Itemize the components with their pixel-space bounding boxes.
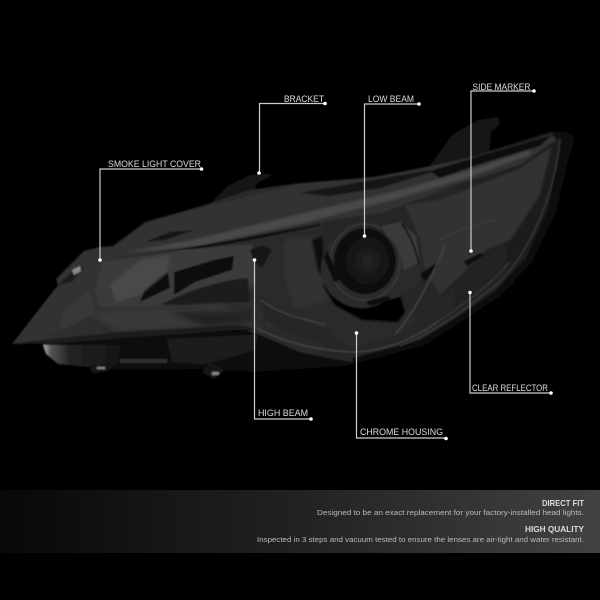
projector lens: [340, 231, 390, 285]
callout: clear reflector: [468, 291, 553, 395]
callout: smoke light cover: [98, 159, 203, 262]
high beam reflector blocks: [95, 244, 256, 310]
outer rim, right side: [352, 133, 575, 362]
callout: bracket: BRACKET: [284, 94, 324, 105]
callout: high beam: HIGH BEAM: [258, 408, 308, 419]
callout: bracket: [257, 94, 327, 175]
side marker detail: [463, 253, 484, 266]
callout: low beam: LOW BEAM: [368, 94, 414, 105]
bracket: left mount tab: [208, 174, 272, 206]
callout: side marker: SIDE MARKER: [472, 82, 531, 93]
lens body: [12, 132, 575, 362]
top strip: [110, 134, 556, 252]
heading: direct fit: DIRECT FIT: [542, 498, 585, 508]
callout: clear reflector: CLEAR REFLECTOR: [472, 383, 548, 394]
projector rings: [321, 228, 403, 308]
callout: chrome housing: CHROME HOUSING: [360, 427, 443, 438]
projector dark surround: [323, 280, 405, 322]
mounting lugs: [90, 362, 225, 379]
bracket: right mount tab: [427, 117, 500, 170]
projector barrel: [382, 222, 420, 270]
rear connector: [494, 266, 516, 292]
lower sweep band: [40, 302, 275, 343]
heading: high quality: HIGH QUALITY: [525, 524, 584, 534]
text: high quality description: Inspected in 3 steps and vacuum tested to ensure the lenses are air-tight and water resistant.: [257, 535, 584, 544]
panel: feature banner: [0, 490, 600, 553]
callout: high beam: [253, 258, 313, 421]
callout: side marker: [469, 82, 536, 253]
lower housing and fog section: [43, 330, 400, 372]
inner housing: [260, 236, 420, 348]
headlight assembly illustration: [12, 117, 575, 379]
callout: chrome housing: [355, 331, 448, 440]
text: direct fit description: Designed to be an exact replacement for your factory-installed head lights.: [317, 508, 584, 517]
callout: low beam: [363, 94, 421, 238]
corner marker glint: [58, 267, 84, 285]
callout: smoke light cover: SMOKE LIGHT COVER: [108, 159, 201, 170]
